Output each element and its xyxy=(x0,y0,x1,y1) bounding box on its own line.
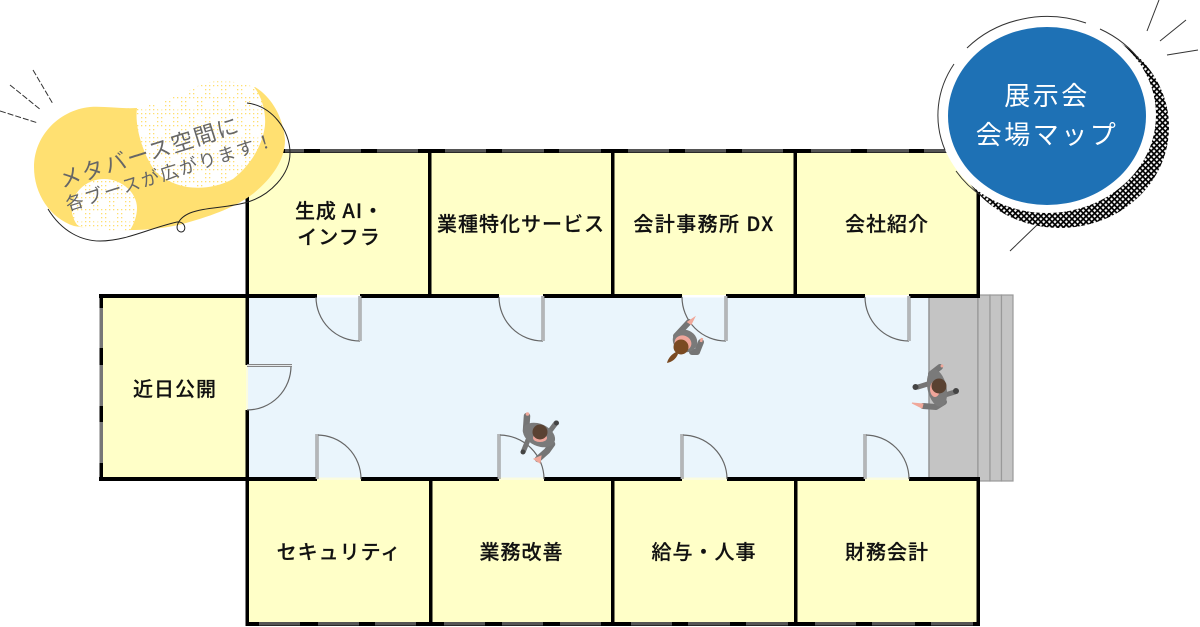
label: 給与・人事: 給与・人事 xyxy=(652,536,756,565)
burst lines right xyxy=(1010,0,1198,251)
blob: yellow xyxy=(34,87,285,230)
door openings xyxy=(317,295,909,298)
label: 会計事務所 DX: 会計事務所 DX xyxy=(633,208,775,237)
label: セキュリティ: セキュリティ xyxy=(277,536,401,565)
label: 生成 AI・インフラ: インフラ xyxy=(297,221,381,250)
entrance steps xyxy=(978,295,1013,481)
person: woman near door xyxy=(667,318,702,363)
badge: 展示会 会場マップ xyxy=(938,17,1169,228)
room: 会社紹介 xyxy=(795,151,978,296)
callout text: メタバース空間に xyxy=(54,107,244,195)
walls xyxy=(99,149,980,626)
person: man on entrance xyxy=(912,364,959,409)
room: 給与・人事 xyxy=(612,479,795,624)
room: 財務会計 xyxy=(795,479,978,624)
room: 生成AI・インフラ xyxy=(247,151,430,296)
room labels xyxy=(133,195,929,565)
badge shadow xyxy=(951,26,1169,228)
label: 近日公開: 近日公開 xyxy=(133,373,217,402)
label: 会社紹介: 会社紹介 xyxy=(845,208,929,237)
callout: metaverse blob xyxy=(34,81,290,241)
doors xyxy=(247,296,909,479)
burst lines left xyxy=(0,70,53,123)
badge title: 展示会 xyxy=(1004,76,1090,113)
badge title: 会場マップ xyxy=(976,115,1118,152)
windows xyxy=(100,149,973,626)
badge ring xyxy=(938,17,1142,197)
floor plan xyxy=(99,149,1013,626)
room: 業務改善 xyxy=(430,479,612,624)
blob: white dotted large xyxy=(137,81,265,188)
room: セキュリティ xyxy=(247,479,430,624)
badge title xyxy=(976,76,1118,152)
room: 会計事務所DX xyxy=(612,151,795,296)
corridor floor xyxy=(247,296,930,479)
label: 業務改善: 業務改善 xyxy=(480,536,564,565)
label: 財務会計: 財務会計 xyxy=(845,536,929,565)
label: 業種特化サービス: 業種特化サービス xyxy=(437,208,605,237)
person: man near lower door xyxy=(519,412,559,463)
room: 業種特化サービス xyxy=(430,151,612,296)
label: 生成 AI・インフラ xyxy=(295,195,384,250)
blob: white dotted small xyxy=(72,179,137,230)
callout text: 各ブースが広がります！ xyxy=(62,126,279,217)
badge halo xyxy=(938,17,1156,213)
decorative curve xyxy=(48,103,290,241)
badge circle xyxy=(948,27,1146,205)
label: 生成 AI・インフラ: 生成 AI・ xyxy=(295,195,384,224)
entrance floor xyxy=(929,296,978,479)
room: 近日公開 xyxy=(101,296,247,479)
